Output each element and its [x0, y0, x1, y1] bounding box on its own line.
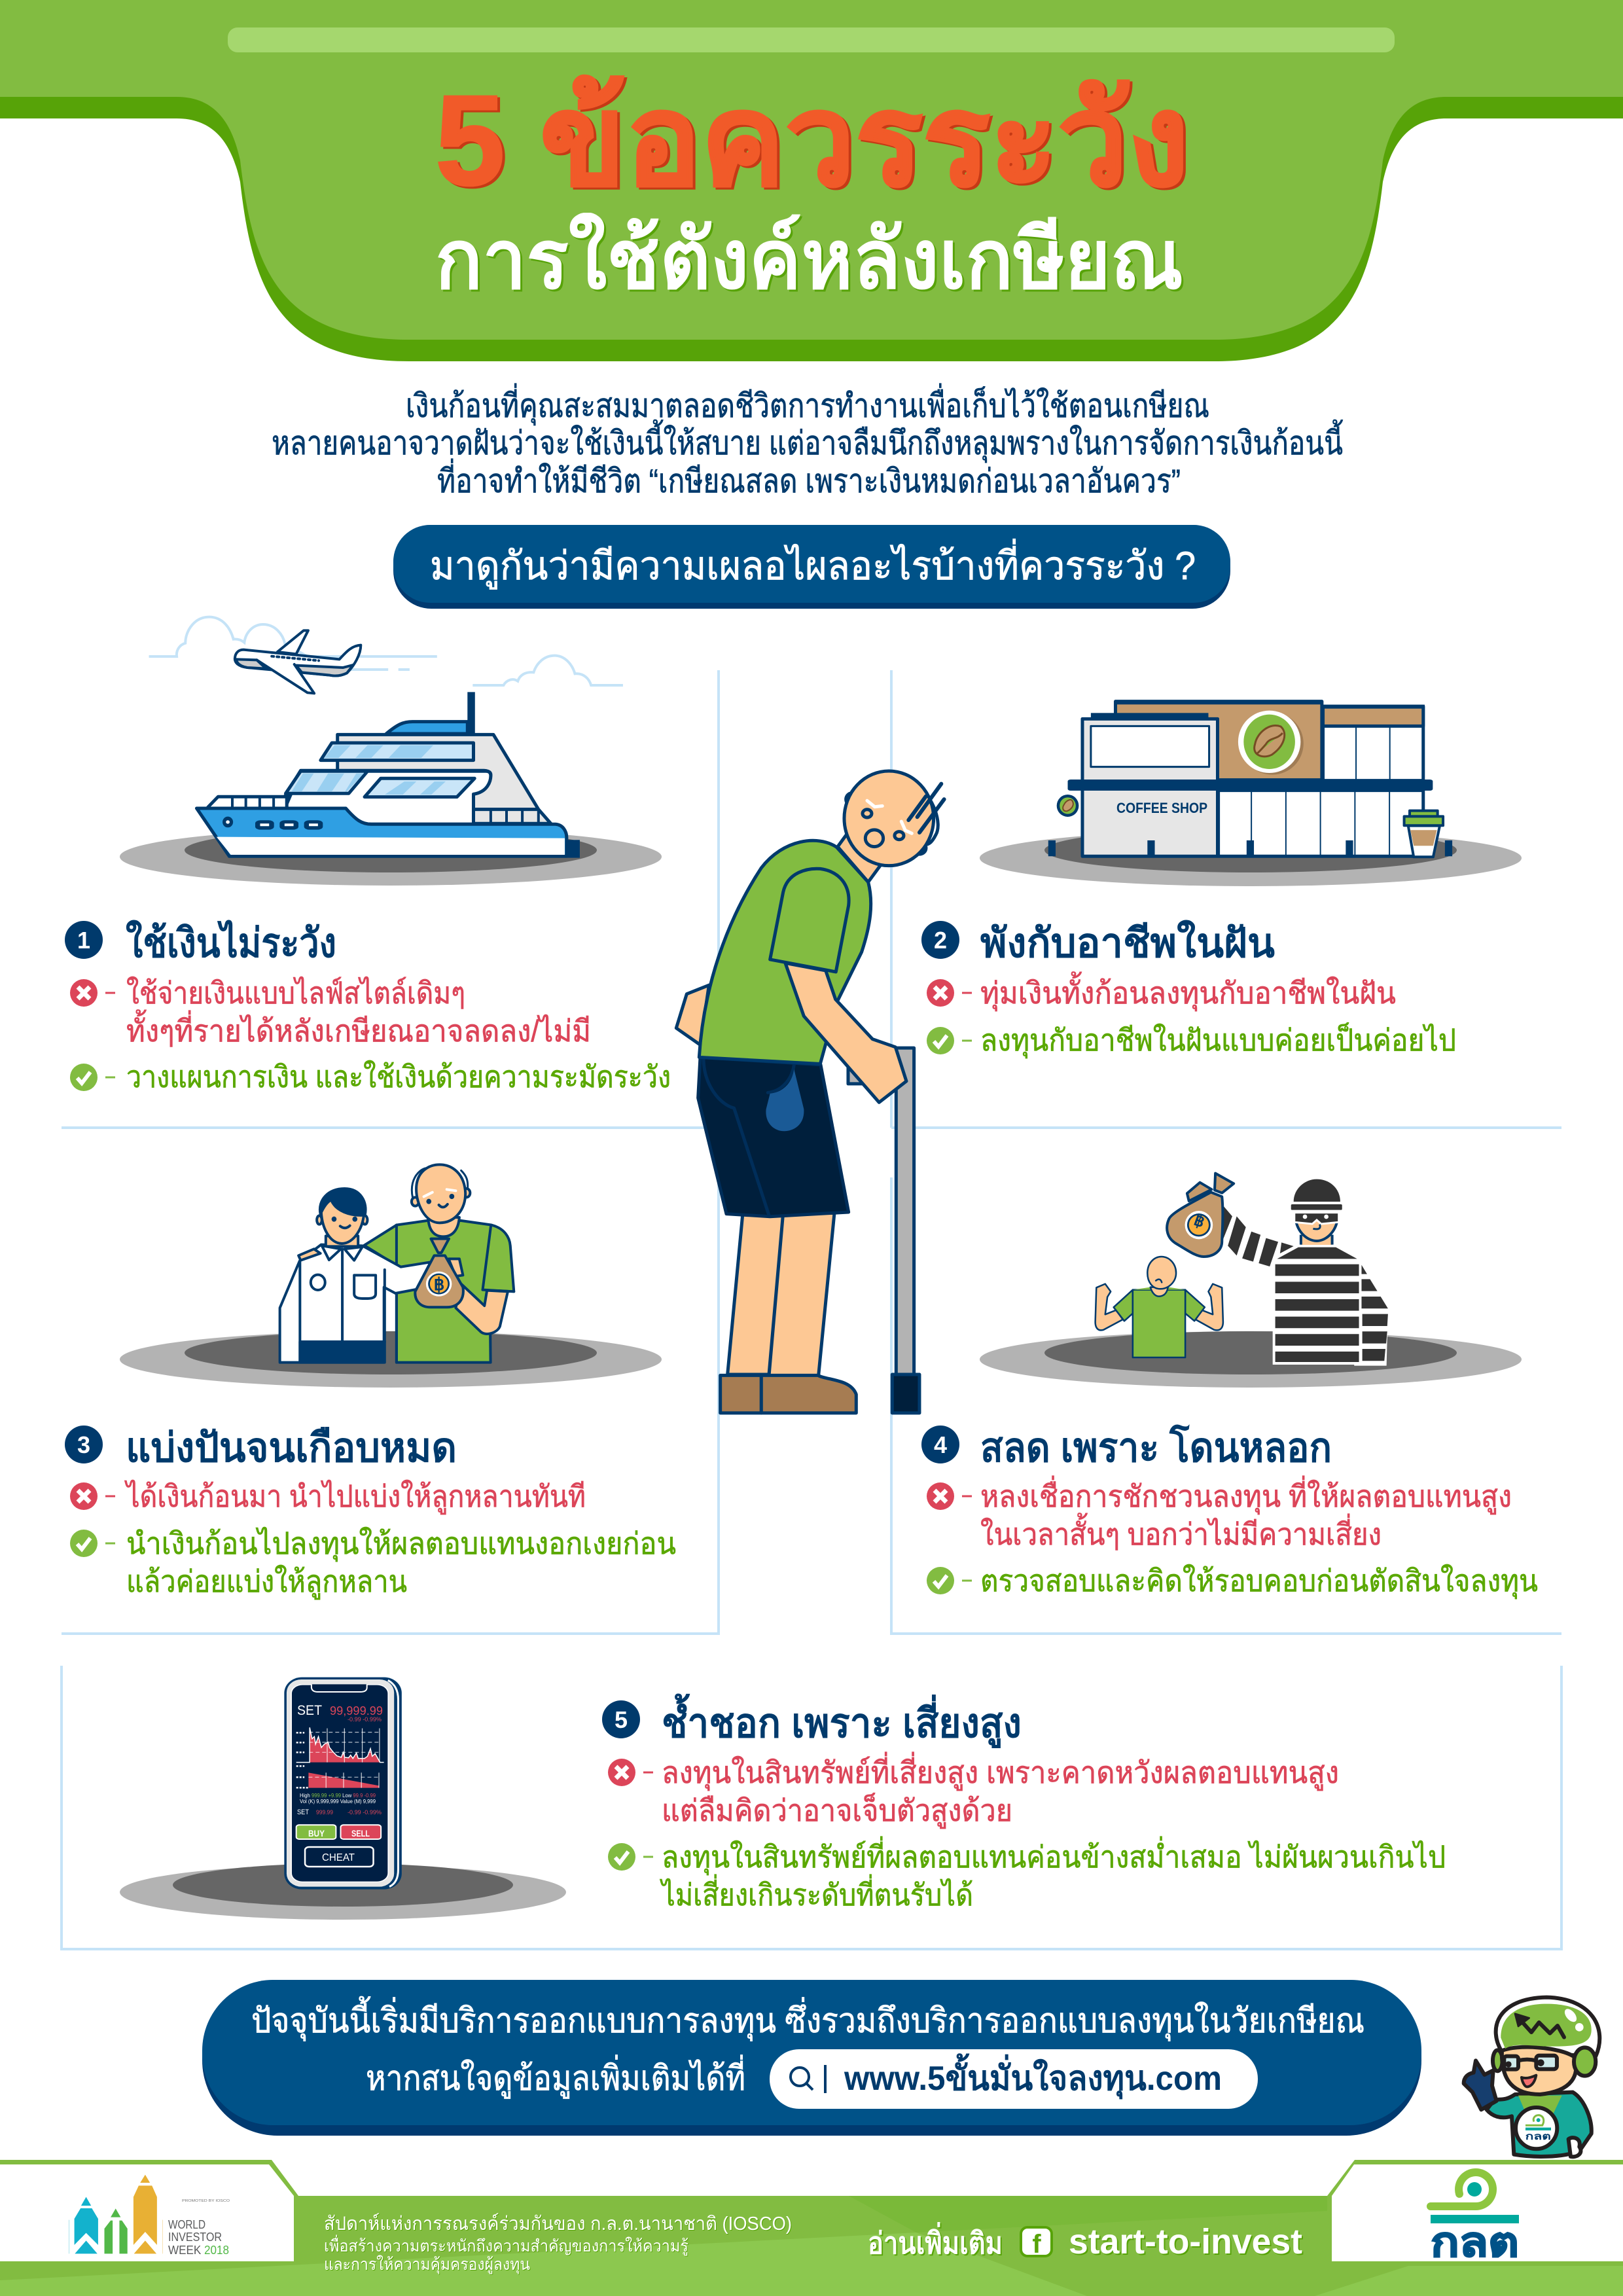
panel: tip 1: [65, 920, 671, 1094]
illustration: stock trading phone: CHEAT: [322, 1852, 355, 1863]
footer campaign text: เพื่อสร้างความตระหนักถึงความสำคัญของการให้ความรู้: [324, 2234, 688, 2256]
question pill: มาดูกันว่ามีความเผลอไผลอะไรบ้างที่ควรระวัง ?: [430, 539, 1196, 590]
panel: tip 2: 2: [934, 927, 947, 954]
advice text 4: ตรวจสอบและคิดให้รอบคอบก่อนตัดสินใจลงทุน: [980, 1564, 1538, 1600]
icon: cross: [70, 1482, 115, 1510]
illustration: stock trading phone: -0.99 -0.99%: [348, 1809, 382, 1816]
illustration: elder and thief: ฿: [1192, 1211, 1207, 1231]
footer: [0, 2160, 1623, 2296]
call to action pill: [202, 1980, 1421, 2136]
illustration: elder leaning on cane: [676, 771, 944, 1413]
footer campaign text: และการให้ความคุ้มครองผู้ลงทุน: [324, 2255, 530, 2274]
panel: tip 4: 4: [934, 1431, 947, 1458]
logo: world investor week: PROMOTED BY IOSCO: [182, 2199, 230, 2203]
heading 1: ใช้เงินไม่ระวัง: [126, 920, 336, 966]
read more link: [868, 2222, 1302, 2261]
warning text 1: ทั้งๆที่รายได้หลังเกษียณอาจลดลง/ไม่มี: [126, 1009, 591, 1048]
subtitle: การใช้ตังค์หลังเกษียณ: [435, 213, 1183, 306]
logo: world investor week: [69, 2175, 230, 2257]
heading 5: ช้ำชอก เพราะ เสี่ยงสูง: [662, 1693, 1022, 1748]
logo: world investor week: WORLD: [168, 2218, 205, 2231]
icon: check: [927, 1027, 972, 1054]
read more link: อ่านเพิ่มเติม: [868, 2222, 1003, 2260]
advice text 5: ลงทุนในสินทรัพย์ที่ผลตอบแทนค่อนข้างสม่ำเสมอ ไม่ผันผวนเกินไป: [662, 1836, 1446, 1876]
icon: cross: [608, 1759, 653, 1786]
warning text 1: [126, 976, 591, 1048]
icon: cross: [927, 1482, 972, 1510]
heading 4: สลด เพราะ โดนหลอก: [980, 1424, 1332, 1471]
heading 3: แบ่งปันจนเกือบหมด: [126, 1426, 457, 1471]
logo: SEC Thailand: กลต: [1431, 2220, 1519, 2265]
illustration: stock trading phone: 99,999.99: [330, 1704, 383, 1717]
question pill: [393, 525, 1230, 609]
advice text 3: [126, 1526, 676, 1600]
icon: mascot: กลต: [1525, 2131, 1551, 2142]
footer campaign text: สัปดาห์แห่งการรณรงค์ร่วมกันของ ก.ล.ต.นานาชาติ (IOSCO): [324, 2213, 792, 2234]
illustration: coffee shop: COFFEE SHOP: [1116, 800, 1207, 816]
icon: cross: [70, 979, 115, 1007]
advice text 3: นำเงินก้อนไปลงทุนให้ผลตอบแทนงอกเงยก่อน: [126, 1526, 676, 1562]
advice text 1: วางแผนการเงิน และใช้เงินด้วยความระมัดระวัง: [126, 1060, 671, 1094]
illustration: stock trading phone: 999.99: [316, 1809, 333, 1816]
warning text 3: ได้เงินก้อนมา นำไปแบ่งให้ลูกหลานทันที: [124, 1479, 586, 1515]
read more link: start-to-invest: [1069, 2222, 1302, 2261]
warning text 4: หลงเชื่อการชักชวนลงทุน ที่ให้ผลตอบแทนสูง: [980, 1475, 1512, 1515]
panel: tip 1: 1: [77, 927, 90, 954]
warning text 1: ใช้จ่ายเงินแบบไลฟ์สไตล์เดิมๆ: [126, 976, 465, 1010]
warning text 4: [980, 1475, 1512, 1551]
title: 5 ข้อควรระวัง: [435, 69, 1189, 212]
intro paragraph: ที่อาจทำให้มีชีวิต “เกษียณสลด เพราะเงินหมดก่อนเวลาอันควร”: [437, 459, 1181, 499]
call to action pill: ปัจจุบันนี้เริ่มมีบริการออกแบบการลงทุน ซึ่งรวมถึงบริการออกแบบลงทุนในวัยเกษียณ: [251, 1996, 1364, 2041]
warning text 2: ทุ่มเงินทั้งก้อนลงทุนกับอาชีพในฝัน: [980, 971, 1396, 1012]
illustration: elder with son: [120, 1164, 662, 1388]
logo: world investor week: WEEK 2018: [168, 2244, 229, 2257]
heading 2: พังกับอาชีพในฝัน: [980, 920, 1275, 966]
panel dividers: [62, 670, 1561, 1949]
icon: cross: [927, 979, 972, 1007]
warning text 5: [662, 1751, 1339, 1829]
warning text 5: แต่ลืมคิดว่าอาจเจ็บตัวสูงด้วย: [662, 1793, 1012, 1829]
header banner: [0, 0, 1623, 361]
panel: tip 5: 5: [615, 1706, 628, 1733]
illustration: yacht and plane: [120, 617, 662, 886]
illustration: elder with son: ฿: [434, 1274, 444, 1294]
intro paragraph: [272, 384, 1343, 499]
icon: mascot: [1464, 1998, 1599, 2157]
search box: www.5ขั้นมั่นใจลงทุน.com: [844, 2053, 1222, 2100]
panel: tip 4: [921, 1424, 1538, 1600]
read more link: f: [1032, 2230, 1041, 2259]
illustration: stock trading phone: [120, 1677, 566, 1920]
advice text 3: แล้วค่อยแบ่งให้ลูกหลาน: [126, 1564, 407, 1600]
panel: tip 5: [602, 1693, 1446, 1912]
illustration: stock trading phone: SET: [297, 1808, 309, 1816]
icon: check: [608, 1843, 653, 1871]
illustration: stock trading phone: BUY: [308, 1828, 325, 1839]
call to action pill: หากสนใจดูข้อมูลเพิ่มเติมได้ที่: [366, 2054, 745, 2099]
logo: SEC Thailand: [1431, 2172, 1519, 2265]
icon: check: [70, 1064, 115, 1091]
icon: check: [927, 1567, 972, 1594]
advice text 2: ลงทุนกับอาชีพในฝันแบบค่อยเป็นค่อยไป: [980, 1022, 1456, 1059]
intro paragraph: เงินก้อนที่คุณสะสมมาตลอดชีวิตการทำงานเพื่อเก็บไว้ใช้ตอนเกษียณ: [406, 384, 1209, 425]
panel: tip 2: [921, 920, 1456, 1059]
icon: check: [70, 1530, 115, 1557]
illustration: stock trading phone: Vol (K) 9,999,999 Value (M) 9,999: [300, 1799, 376, 1804]
illustration: stock trading phone: SELL: [351, 1828, 370, 1839]
logo: world investor week: INVESTOR: [168, 2231, 222, 2244]
advice text 5: ไม่เสี่ยงเกินระดับที่ตนรับได้: [659, 1874, 973, 1912]
advice text 5: [659, 1836, 1446, 1912]
warning text 4: ในเวลาสั้นๆ บอกว่าไม่มีความเสี่ยง: [980, 1513, 1382, 1551]
panel: tip 3: 3: [77, 1431, 90, 1458]
warning text 5: ลงทุนในสินทรัพย์ที่เสี่ยงสูง เพราะคาดหวังผลตอบแทนสูง: [662, 1751, 1339, 1791]
illustration: elder and thief: [980, 1174, 1522, 1388]
illustration: stock trading phone: SET: [297, 1703, 322, 1718]
illustration: stock trading phone: -0.99 -0.99%: [348, 1716, 382, 1723]
illustration: coffee shop: [980, 700, 1522, 886]
illustration: stock trading phone: High 999.99 +9.99 Low 99.9 -0.99: [300, 1793, 376, 1799]
search box: [770, 2049, 1258, 2109]
intro paragraph: หลายคนอาจวาดฝันว่าจะใช้เงินนี้ให้สบาย แต่อาจลืมนึกถึงหลุมพรางในการจัดการเงินก้อนนี้: [272, 420, 1343, 463]
panel: tip 3: [65, 1426, 676, 1600]
footer campaign text: [324, 2213, 792, 2274]
